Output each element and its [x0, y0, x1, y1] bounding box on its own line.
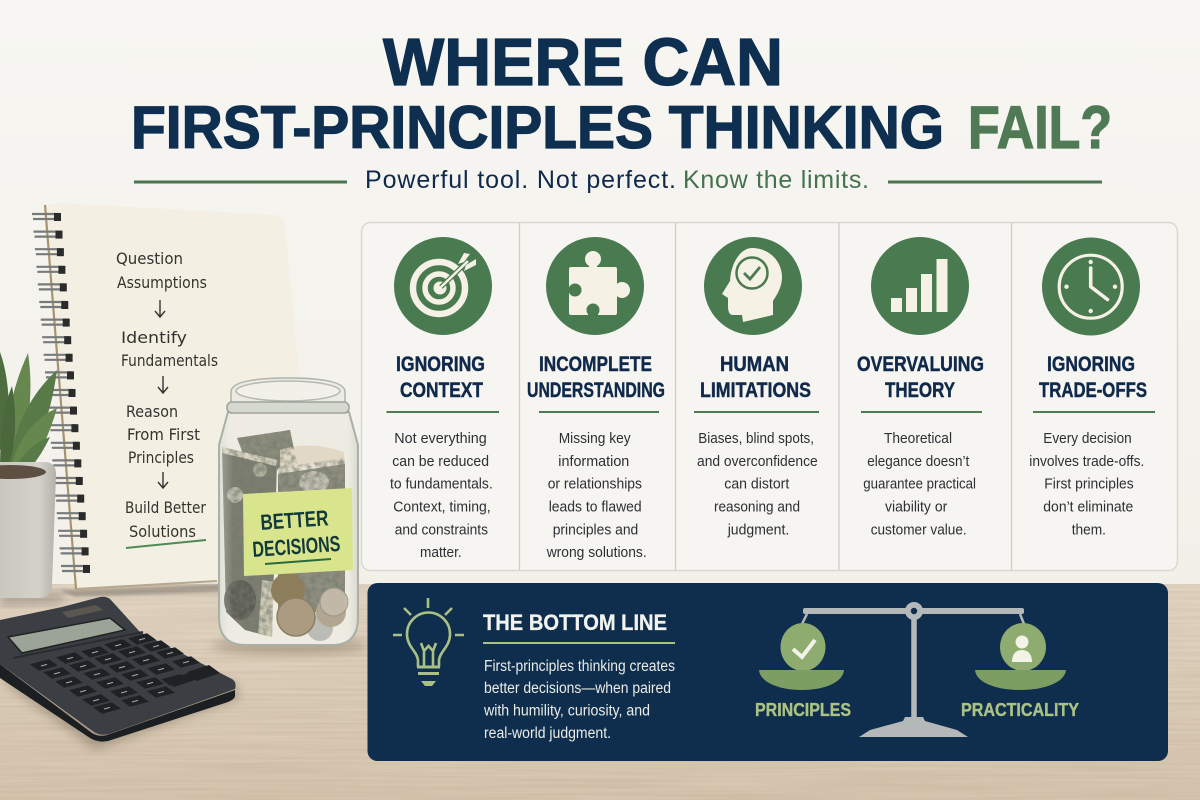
body text: and overconfidence — [697, 454, 818, 470]
body text: to fundamentals. — [390, 477, 493, 493]
title: FIRST-PRINCIPLES THINKING — [131, 94, 944, 161]
jar coins — [271, 573, 348, 641]
money jar — [212, 378, 368, 655]
notebook with handwritten flow — [32, 203, 302, 597]
handwritten steps: Principles — [128, 448, 194, 467]
wooden desk — [0, 584, 1200, 800]
sticky note: better decisions: DECISIONS — [252, 531, 341, 562]
body text: Missing key — [559, 431, 631, 447]
body text — [483, 658, 675, 742]
calculator — [0, 597, 240, 750]
handwritten steps: Identify — [121, 328, 187, 347]
left pan: principles — [755, 623, 851, 720]
body text: judgment. — [727, 522, 789, 538]
heading: INCOMPLETE — [539, 353, 652, 376]
body text: and constraints — [395, 522, 488, 538]
heading: THE BOTTOM LINE — [483, 610, 667, 635]
body text: real-world judgment. — [484, 725, 611, 742]
panel: five failure modes — [362, 222, 1178, 570]
handwritten steps — [116, 249, 218, 548]
heading — [700, 353, 811, 402]
body text — [546, 431, 647, 561]
handwritten steps: Reason — [126, 402, 178, 421]
body text: Context, timing, — [393, 500, 491, 516]
balance scale — [755, 602, 1079, 737]
card: ignoring trade-offs — [1029, 238, 1155, 538]
icon: rising bars — [871, 237, 969, 335]
subtitle with rules: Know the limits. — [683, 166, 869, 194]
body text — [1029, 431, 1144, 538]
heading: IGNORING — [1047, 353, 1135, 376]
body text: Not everything — [394, 431, 487, 447]
heading: LIMITATIONS — [700, 379, 811, 402]
heading: OVERVALUING — [857, 353, 984, 376]
right pan: practicality — [961, 623, 1079, 720]
body text: them. — [1072, 522, 1106, 538]
body text: elegance doesn’t — [867, 454, 969, 470]
body text: First-principles thinking creates — [484, 658, 675, 675]
body text: reasoning and — [714, 500, 800, 516]
icon: target — [394, 237, 492, 335]
panel: the bottom line — [368, 583, 1168, 761]
card: ignoring context — [386, 237, 499, 561]
body text: guarantee practical — [863, 477, 976, 493]
title: WHERE CAN — [383, 25, 783, 100]
body text: matter. — [420, 545, 462, 561]
body text: viability or — [885, 500, 947, 516]
left pan: principles: PRINCIPLES — [755, 700, 851, 720]
heading — [1039, 353, 1147, 402]
calculator body — [0, 664, 235, 742]
body text — [863, 431, 976, 538]
handwritten steps: From First — [127, 425, 200, 444]
body text: don’t eliminate — [1043, 500, 1133, 516]
subtitle with rules — [134, 166, 1102, 194]
heading: THEORY — [885, 379, 955, 402]
handwritten steps: Assumptions — [117, 273, 207, 292]
jar rim — [227, 378, 349, 413]
title: FAIL? — [968, 94, 1112, 161]
body text: wrong solutions. — [546, 545, 647, 561]
body text — [697, 431, 818, 538]
heading — [527, 353, 665, 402]
body text: leads to flawed — [549, 500, 642, 516]
heading: HUMAN — [720, 353, 789, 376]
heading: TRADE-OFFS — [1039, 379, 1147, 402]
body text: Every decision — [1043, 431, 1132, 447]
jar banknotes — [222, 430, 345, 637]
calculator solar panel — [62, 605, 103, 618]
body text: involves trade-offs. — [1029, 454, 1144, 470]
body text: with humility, curiosity, and — [483, 702, 650, 720]
heading — [396, 353, 485, 402]
title — [131, 25, 1112, 161]
icon: head with check — [704, 237, 802, 335]
body text: Biases, blind spots, — [698, 431, 814, 447]
icon: clock — [1042, 238, 1140, 336]
icon: puzzle piece — [546, 237, 644, 335]
body text: better decisions—when paired — [484, 680, 671, 697]
calculator keys — [30, 633, 220, 714]
card: human limitations — [694, 237, 819, 538]
body text: customer value. — [871, 522, 967, 538]
heading: IGNORING — [396, 353, 485, 376]
notebook spiral binding — [32, 213, 90, 573]
calculator display — [8, 618, 125, 653]
body text: Theoretical — [884, 431, 952, 447]
body text: principles and — [553, 522, 638, 538]
body text: information — [558, 454, 629, 470]
handwritten steps: Fundamentals — [121, 351, 218, 370]
handwritten steps: Solutions — [129, 522, 196, 541]
body text: can be reduced — [392, 454, 489, 470]
body text — [390, 431, 493, 561]
heading: CONTEXT — [400, 379, 483, 402]
icon: light bulb — [393, 598, 464, 686]
body text: or relationships — [548, 477, 642, 493]
heading — [857, 353, 984, 402]
handwritten steps: Question — [116, 249, 183, 268]
handwritten steps: Build Better — [125, 498, 206, 517]
potted plant — [0, 352, 70, 606]
card: overvaluing theory — [857, 237, 984, 538]
heading: UNDERSTANDING — [527, 379, 665, 402]
card: incomplete understanding — [527, 237, 665, 561]
body text: can distort — [724, 477, 789, 493]
sticky note: better decisions — [243, 488, 353, 576]
subtitle with rules: Powerful tool. Not perfect. — [365, 166, 676, 194]
sticky note: better decisions: BETTER — [260, 505, 329, 535]
background wall — [0, 0, 1200, 590]
right pan: practicality: PRACTICALITY — [961, 700, 1079, 720]
plant leaves — [0, 352, 57, 474]
body text: First principles — [1044, 477, 1134, 493]
